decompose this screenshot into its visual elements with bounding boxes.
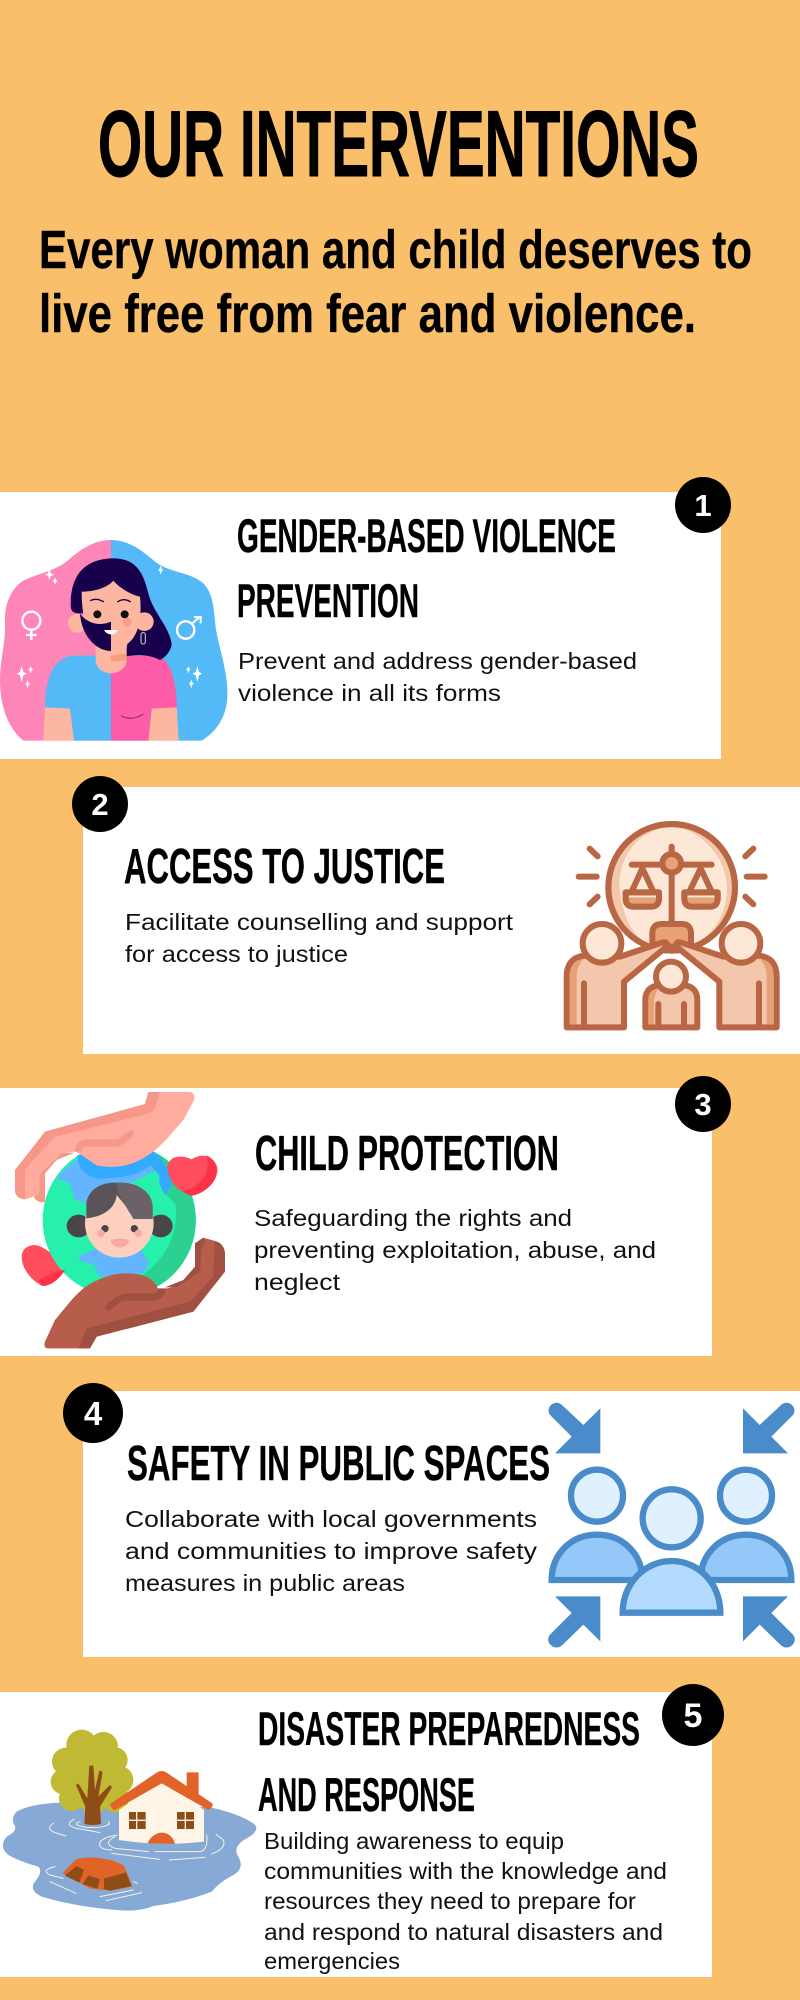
icon: flooded house, tree and car (3, 1730, 256, 1911)
heading: ACCESS TO JUSTICE (124, 840, 445, 894)
description: measures in public areas (125, 1570, 405, 1596)
panel: gender-based violence prevention (0, 477, 731, 759)
panel: access to justice (72, 776, 800, 1054)
car (62, 1857, 133, 1891)
number badge 4: 4 (84, 1395, 103, 1432)
description: resources they need to prepare for (264, 1888, 636, 1914)
number badge 3 (675, 1076, 731, 1132)
description (238, 648, 637, 706)
number badge 2: 2 (91, 787, 109, 822)
number badge 4 (63, 1383, 123, 1443)
icon: child on globe held by hands (15, 1092, 225, 1348)
icon: group of people with inward arrows (548, 1403, 795, 1648)
description (264, 1828, 667, 1974)
description: preventing exploitation, abuse, and (254, 1237, 656, 1263)
description: Collaborate with local governments (125, 1506, 537, 1532)
left heart (22, 1245, 65, 1286)
number badge 5: 5 (684, 1697, 702, 1735)
panel: safety in public spaces (63, 1383, 800, 1657)
heading: PREVENTION (237, 574, 419, 627)
description: Safeguarding the rights and (254, 1205, 572, 1231)
description: Prevent and address gender-based (238, 648, 637, 674)
tree (51, 1730, 133, 1814)
bottom hand (44, 1238, 225, 1348)
description: and communities to improve safety (125, 1538, 538, 1564)
number badge 2 (72, 776, 128, 832)
description: and respond to natural disasters and (264, 1919, 663, 1945)
number badge 1 (675, 477, 731, 533)
description: communities with the knowledge and (264, 1858, 667, 1884)
heading: SAFETY IN PUBLIC SPACES (127, 1437, 550, 1491)
description: Facilitate counselling and support (125, 909, 514, 935)
heading: AND RESPONSE (258, 1768, 475, 1821)
panel: child protection (0, 1076, 731, 1356)
description: Building awareness to equip (264, 1828, 564, 1854)
description: violence in all its forms (238, 680, 501, 706)
icon: scales of justice and family (567, 824, 777, 1027)
heading (258, 1702, 640, 1821)
number badge 1: 1 (694, 488, 712, 523)
number badge 5 (662, 1684, 724, 1746)
heading (237, 509, 616, 627)
description (125, 1506, 538, 1596)
right heart (167, 1156, 217, 1196)
top hand (15, 1092, 194, 1200)
number badge 3: 3 (694, 1087, 712, 1122)
heading: CHILD PROTECTION (255, 1127, 559, 1181)
description (125, 909, 514, 967)
description: for access to justice (125, 941, 348, 967)
description (254, 1205, 656, 1295)
subtitle (39, 220, 752, 344)
description: neglect (254, 1269, 341, 1295)
panel: disaster preparedness and response (0, 1684, 724, 1977)
water ripples (46, 1819, 224, 1901)
house (119, 1780, 204, 1844)
description: emergencies (264, 1948, 400, 1974)
icon: half woman half man (0, 540, 227, 741)
child (67, 1215, 91, 1237)
